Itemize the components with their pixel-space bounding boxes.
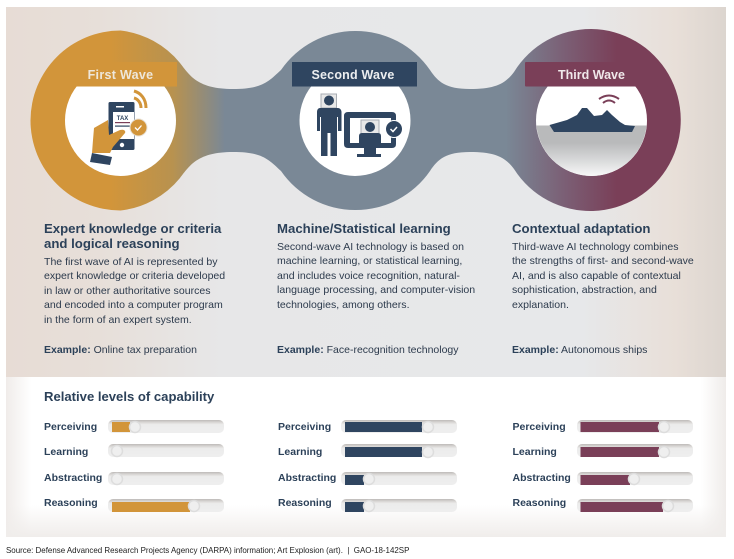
icon: first wave tax phone [65, 65, 176, 176]
panel: capability section background [6, 377, 726, 537]
bar chart: second wave capability: Perceiving [278, 421, 331, 433]
bar chart: third wave capability: Learning [512, 446, 557, 458]
heading: relative levels of capability: Relative levels of capability [44, 389, 215, 404]
text block: second wave: and includes voice recognition, natural- [277, 270, 460, 282]
bar chart: first wave capability: Abstracting [44, 472, 102, 484]
heading tab: Second Wave [292, 62, 417, 86]
bar chart: third wave capability: Reasoning [512, 497, 566, 509]
text block: third wave: Third-wave AI technology combines [512, 241, 678, 253]
text block: second wave: Second-wave AI technology is based on [277, 241, 464, 253]
panel: background upper [6, 7, 726, 377]
text block: third wave: explanation. [512, 299, 569, 311]
text block: first wave: Expert knowledge or criteria [44, 221, 222, 236]
text block: second wave: technologies, among others. [277, 299, 410, 311]
bar chart: third wave capability: Perceiving [512, 421, 566, 433]
bar chart: second wave capability: Abstracting [278, 472, 336, 484]
text block: third wave [512, 221, 694, 356]
bar chart: first wave capability: Reasoning [44, 497, 98, 509]
icon: second wave face recognition [300, 65, 410, 176]
heading tab: Second Wave: Second Wave [311, 68, 395, 82]
text block: third wave: the strengths of first- and second-wave [512, 255, 694, 267]
icon: third wave ship [536, 65, 647, 176]
text block: third wave: Contextual adaptation [512, 221, 650, 236]
text block: first wave [44, 221, 225, 356]
bar chart: third wave capability [512, 420, 693, 512]
text block: first wave: Example: Online tax preparation [44, 344, 197, 356]
bar chart: first wave capability: Perceiving [44, 421, 97, 433]
text block: third wave: AI, and is also capable of contextual [512, 270, 681, 282]
text block: first wave: expert knowledge or criteria developed [44, 270, 225, 282]
text block: first wave: in the form of an expert system. [44, 314, 192, 326]
text block: third wave: Example: Autonomous ships [512, 344, 647, 356]
text block: third wave: sophistication, abstraction, and [512, 284, 657, 296]
text block: second wave [277, 221, 475, 356]
bar chart: first wave capability [44, 420, 224, 512]
text block: second wave: Machine/Statistical learning [277, 221, 451, 236]
text block: second wave: language processing, and computer-vision [277, 284, 475, 296]
bar chart: second wave capability [278, 420, 457, 512]
text block: second wave: Example: Face-recognition technology [277, 344, 459, 356]
bar chart: second wave capability: Learning [278, 446, 322, 458]
wave band shape [30, 29, 681, 211]
bar chart: third wave capability: Abstracting [512, 472, 571, 484]
bar chart: first wave capability: Learning [44, 446, 88, 458]
text block: first wave: and logical reasoning [44, 236, 180, 251]
heading tab: Third Wave [525, 62, 658, 86]
icon: first wave tax phone: TAX [117, 116, 128, 122]
text block: first wave: The first wave of AI is represented by [44, 256, 218, 268]
text block: first wave: and encoded into a computer program [44, 299, 223, 311]
bar chart: second wave capability: Reasoning [278, 497, 332, 509]
text block: second wave: machine learning, or statistical learning, [277, 255, 462, 267]
heading tab: Third Wave: Third Wave [558, 68, 625, 82]
heading tab: First Wave: First Wave [88, 68, 153, 82]
text block: first wave: in law or other authoritative sources [44, 285, 210, 297]
heading tab: First Wave [62, 62, 177, 86]
source note: Source: Defense Advanced Research Projects Agency (DARPA) information; Art Explosion (art). | GAO-18-142SP [6, 546, 409, 555]
